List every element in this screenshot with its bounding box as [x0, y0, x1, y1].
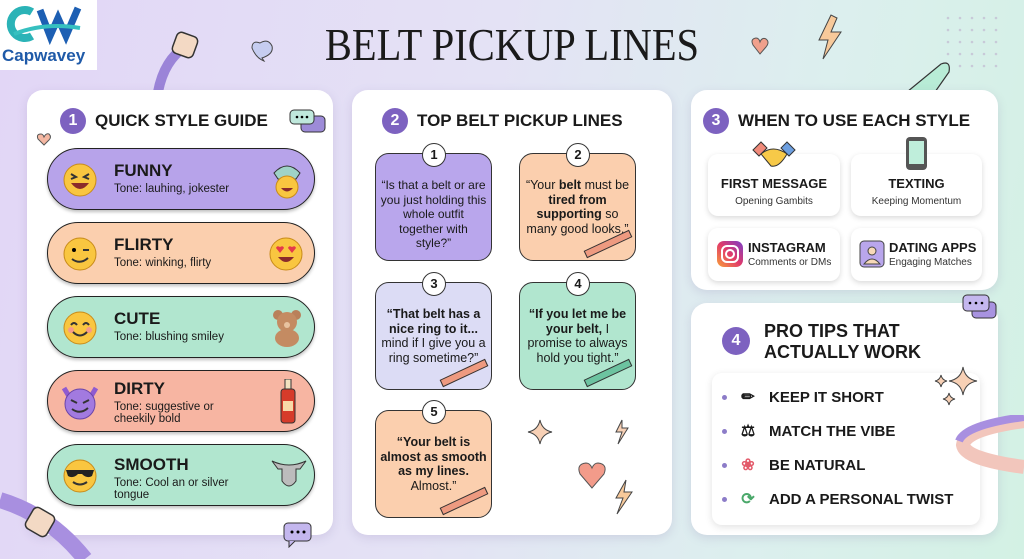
heading: TOP BELT PICKUP LINES: [417, 111, 623, 130]
sub: texting: Keeping Momentum: [872, 196, 961, 207]
sub: dating apps: [851, 228, 982, 281]
tips list: [712, 373, 980, 525]
heading: 3: [712, 112, 720, 129]
decoration: top belt: [153, 32, 198, 90]
tips list: BE NATURAL: [769, 456, 865, 474]
row: flirty: Tone: winking, flirty: [114, 257, 211, 269]
tips list: ⚖: [741, 423, 755, 440]
sub: first message: FIRST MESSAGE: [721, 176, 827, 191]
row: cute: CUTE: [114, 309, 160, 328]
heading: 4: [732, 332, 740, 349]
panel: when to use each style: [691, 90, 998, 290]
row: flirty: FLIRTY: [114, 235, 174, 254]
row: dirty: Tone: suggestive or cheekily bold: [114, 401, 214, 425]
card 5: 5: [430, 404, 438, 419]
card 3: 3: [430, 276, 438, 291]
row: dirty: [47, 370, 315, 432]
card 2: 2: [574, 147, 582, 162]
tips list: MATCH THE VIBE: [769, 422, 895, 440]
card 1: 1: [430, 147, 438, 162]
card 1: [375, 153, 492, 261]
row: dirty: DIRTY: [114, 379, 165, 398]
panel: top belt pickup lines: [352, 90, 672, 535]
heading: 1: [69, 112, 77, 129]
sub: instagram: Comments or DMs: [748, 257, 831, 268]
panel: quick style guide: [27, 90, 333, 535]
title: BELT PICKUP LINES: [325, 19, 699, 70]
card 4: “If you let me be your belt, I promise to always hold you tight.”: [527, 307, 628, 364]
panel: pro tips: ACTUALLY WORK: [764, 342, 921, 362]
tips list: KEEP IT SHORT: [769, 388, 884, 406]
row: smooth: Tone: Cool an or silver tongue: [114, 477, 228, 501]
tips list: ADD A PERSONAL TWIST: [769, 490, 953, 508]
row: smooth: [47, 444, 315, 506]
sub: dating apps: DATING APPS: [889, 240, 976, 255]
decoration: heart: [752, 38, 768, 55]
tips list: ❀: [741, 457, 755, 474]
sub: instagram: [708, 228, 840, 281]
icon: chat bubbles: [290, 110, 326, 132]
heading: WHEN TO USE EACH STYLE: [738, 111, 970, 130]
tips list: ✏: [741, 389, 755, 406]
decoration: bottom-left belt: [0, 492, 92, 559]
decoration: chat bubble right: [962, 294, 996, 318]
decoration: right belt: [955, 415, 1024, 474]
sub: first message: Opening Gambits: [735, 196, 813, 207]
decoration: dots grid: [946, 16, 998, 68]
decoration: small heart left: [36, 133, 51, 146]
sub: instagram: INSTAGRAM: [748, 240, 826, 255]
decoration: heart bubble: [252, 40, 273, 62]
icon: handshake: [752, 141, 796, 167]
decoration: bottom chat: [284, 522, 312, 548]
card 3: “That belt has a nice ring to it... mind if I give you a ring sometime?”: [381, 307, 486, 364]
row: flirty: [47, 222, 315, 284]
card 5: “Your belt is almost as smooth as my lines. Almost.”: [380, 435, 487, 492]
heading: [382, 108, 623, 134]
row: funny: Tone: lauhing, jokester: [114, 183, 229, 195]
row: funny: FUNNY: [114, 161, 173, 180]
decoration: lightning: [818, 14, 842, 60]
row: cute: [47, 296, 315, 358]
panel: pro tips: PRO TIPS THAT: [764, 321, 900, 341]
logo: [0, 0, 97, 70]
row: funny: [47, 148, 315, 210]
heading: 2: [391, 112, 399, 129]
decoration: green pill: [908, 62, 950, 90]
sub: dating apps: Engaging Matches: [889, 257, 972, 268]
panel: pro tips: [691, 303, 998, 535]
sub: first message: [708, 154, 840, 216]
card 4: 4: [574, 276, 582, 291]
logo: Capwavey: [2, 46, 85, 65]
card 4: [519, 282, 636, 390]
decoration: sparkles: [934, 366, 978, 406]
card 5: [375, 410, 492, 518]
card 3: [375, 282, 492, 390]
heading: [703, 108, 970, 134]
icon: phone: [906, 137, 927, 170]
sub: texting: [851, 154, 982, 216]
sub: texting: TEXTING: [888, 176, 945, 191]
card 2: “Your belt must be tired from supporting so many good looks.”: [526, 178, 629, 236]
heading: QUICK STYLE GUIDE: [95, 111, 268, 130]
heading: [60, 108, 268, 134]
card 2: [519, 153, 636, 261]
tips list: ⟳: [741, 491, 755, 508]
decoration: sparkle, heart, lightning: [528, 420, 633, 514]
row: smooth: SMOOTH: [114, 455, 189, 474]
row: cute: Tone: blushing smiley: [114, 331, 224, 343]
card 1: “Is that a belt or are you just holding this whole outfit together with style?”: [381, 178, 486, 250]
